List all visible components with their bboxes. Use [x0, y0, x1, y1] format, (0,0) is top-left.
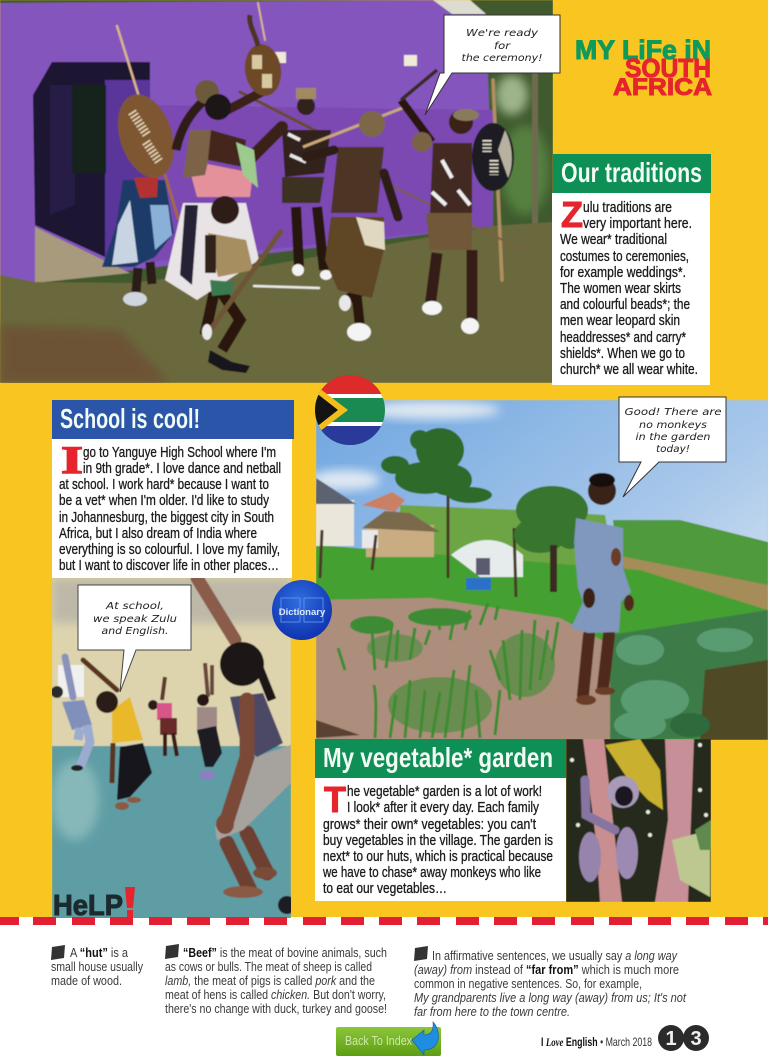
body text: traditions: The women wear skirts: [560, 281, 681, 297]
heading: Our traditions: [553, 154, 711, 193]
body text: school: in Johannesburg, the biggest city in South: [59, 510, 274, 526]
woman: [571, 473, 634, 705]
footnote: far from: far from here to the town centre.: [414, 1004, 570, 1019]
heading: Our traditions: Our traditions: [561, 157, 702, 188]
dashed divider: red: [0, 917, 768, 925]
speech bubble: school language: At school,: [105, 601, 164, 612]
speech bubble: monkeys: today!: [656, 444, 690, 455]
icon: book: [414, 946, 428, 961]
body text: traditions: for example weddings*.: [560, 265, 686, 281]
speech bubble: ceremony: We're ready: [466, 28, 539, 39]
panel: My vegetable garden: [315, 739, 566, 901]
photo: Zulu dancers in front of purple house: [0, 0, 553, 383]
body text: traditions: ulu traditions are: [583, 200, 672, 216]
body text: traditions: very important here.: [583, 216, 692, 232]
body text: traditions: headdresses* and carry*: [560, 330, 686, 346]
body text: school: go to Yanguye High School where I'm: [83, 445, 276, 461]
body text: traditions: We wear* traditional: [560, 232, 667, 248]
body text: school: at school. I work hard* because I want to: [59, 477, 269, 493]
title: AFRICA: [613, 74, 712, 101]
body text: garden: next* to our huts, which is practical because: [323, 849, 553, 865]
icon: Dictionary button: Dictionary: [279, 607, 326, 618]
footnote: far from: (away) from instead of “far from” which is much more: [414, 962, 679, 977]
speech bubble: school language: we speak Zulu: [93, 614, 177, 625]
button: Back To Index: [336, 1022, 441, 1056]
speech bubble: ceremony: [425, 15, 560, 115]
panel: School is cool!: [52, 400, 294, 578]
speech bubble: school language: [78, 585, 191, 692]
speech bubble: ceremony: for: [494, 41, 511, 52]
body text: garden: to eat our vegetables…: [323, 881, 447, 897]
monkey: [579, 776, 639, 882]
heading: School is cool!: [52, 400, 294, 439]
body text: garden: [322, 784, 553, 897]
footnote: beef: meat of hens is called chicken. But don't worry,: [165, 987, 386, 1002]
body text: school: everything is so colourful. I love my family,: [59, 542, 280, 558]
body text: garden: he vegetable* garden is a lot of work!: [347, 784, 542, 800]
body text: school: Africa, but I also dream of India where: [59, 526, 257, 542]
tree left: [381, 428, 492, 503]
body text: school: [59, 445, 281, 574]
dancer: yellow shirt: [83, 660, 152, 810]
body text: traditions: men wear leopard skin: [560, 313, 680, 329]
title: [575, 35, 712, 101]
body text: traditions: costumes to ceremonies,: [560, 249, 689, 265]
footnote: hut: small house usually: [51, 959, 143, 974]
body text: traditions: shields*. When we go to: [560, 346, 685, 362]
speech bubble: school language: and English.: [102, 626, 168, 637]
footnote: beef: [165, 944, 387, 1016]
panel: Our traditions: [552, 154, 711, 385]
photo: girl in the vegetable garden: [310, 400, 768, 740]
photo: monkey on a tree: [566, 739, 711, 902]
body text: traditions: church* we all wear white.: [560, 362, 698, 378]
dancer: pink top: [148, 677, 177, 756]
label: HELP!: HeLP: [53, 890, 123, 922]
drop cap T: T: [324, 779, 346, 820]
tree right: [514, 486, 588, 553]
page number 13: [658, 1025, 709, 1051]
body text: garden: I look* after it every day. Each family: [347, 800, 540, 816]
drop cap I: I: [61, 439, 83, 482]
body text: school: but I want to discover life in other places…: [59, 558, 279, 574]
photo: dance class at school: [51, 578, 296, 921]
title: SOUTH: [625, 53, 711, 83]
footnote: far from: common in negative sentences. So, for example,: [414, 976, 642, 991]
title: MY LiFe iN: [575, 35, 711, 65]
page number 13: 3: [690, 1028, 702, 1050]
speech bubble: ceremony: the ceremony!: [462, 53, 542, 64]
icon: blue arrow: [412, 1022, 438, 1055]
hut: white rondavel: [316, 478, 356, 546]
footer: magazine credit: I Love English • March 2018: [541, 1035, 652, 1049]
heading: My vegetable garden: My vegetable* garden: [323, 742, 553, 773]
body text: garden: we have to chase* away monkeys who like: [322, 865, 541, 881]
heading: My vegetable garden: [315, 739, 566, 778]
vegetable beds: [338, 603, 558, 738]
footnote: far from: In affirmative sentences, we usually say a long way: [432, 948, 678, 963]
icon: book: [165, 944, 179, 959]
speech bubble: monkeys: [619, 397, 726, 497]
footnote: far from: [414, 946, 687, 1019]
page number 13: 1: [665, 1028, 677, 1050]
footnote: far from: My grandparents live a long way (away) from us; It's not: [414, 990, 687, 1005]
speech bubble: monkeys: in the garden: [636, 432, 710, 443]
footnote: hut: A “hut” is a: [70, 945, 129, 960]
heading: School is cool!: School is cool!: [60, 403, 200, 434]
button: Back To Index: Back To Index: [345, 1034, 413, 1048]
body text: garden: buy vegetables in the village. The garden is: [323, 833, 553, 849]
body text: traditions: and colourful beads*; the: [560, 297, 690, 313]
footnote: beef: there's no change with duck, turkey and goose!: [165, 1001, 387, 1016]
dancer: foreground: [197, 578, 291, 898]
drop cap Z: Z: [561, 194, 583, 235]
footnote: beef: “Beef” is the meat of bovine animals, such: [183, 945, 387, 960]
flag badge: South Africa: [315, 375, 385, 445]
speech bubble: monkeys: Good! There are: [624, 407, 722, 418]
dancer: back grey top: [197, 663, 222, 780]
hut: thatched: [362, 511, 440, 557]
footnote: beef: lamb, the meat of pigs is called pork and the: [165, 973, 375, 988]
body text: school: be a vet* when I'm older. I'd like to study: [59, 493, 270, 509]
footnote: beef: as cows or bulls. The meat of sheep is called: [165, 959, 372, 974]
body text: traditions: [560, 200, 698, 378]
footnote: hut: [51, 945, 143, 988]
body text: garden: grows* their own* vegetables: you can't: [323, 817, 536, 833]
dancer: left: [51, 657, 92, 771]
tent: [451, 540, 523, 577]
icon: book: [51, 945, 65, 960]
speech bubble: monkeys: no monkeys: [639, 420, 707, 431]
footnote: hut: made of wood.: [51, 973, 122, 988]
icon: Dictionary button: [272, 580, 332, 640]
body text: school: in 9th grade*. I love dance and netball: [83, 461, 281, 477]
